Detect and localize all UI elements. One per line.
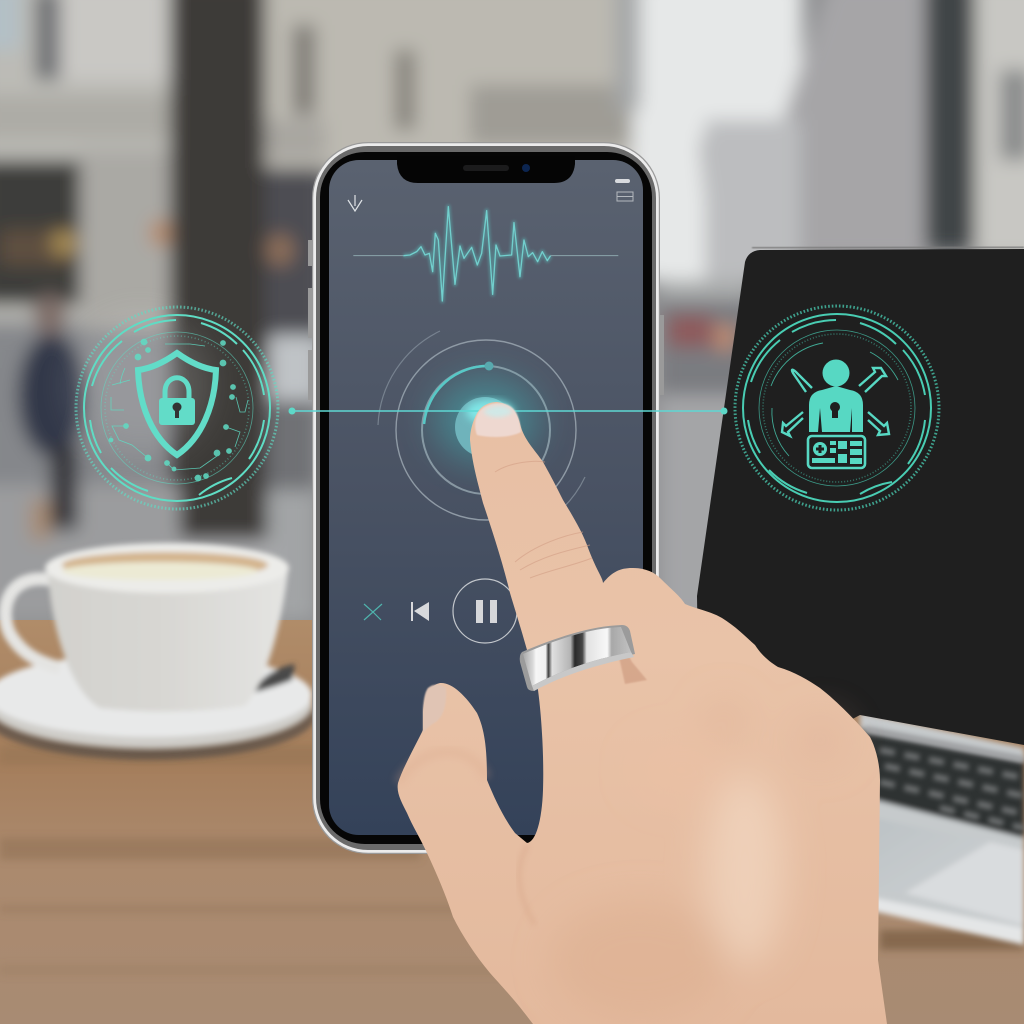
- arrows: [782, 368, 889, 436]
- screen: [329, 160, 643, 835]
- side buttons: [308, 240, 664, 400]
- control panel: [808, 436, 865, 468]
- coffee surface: [62, 552, 268, 578]
- previous icon: [411, 602, 429, 621]
- download icon: [348, 195, 362, 211]
- phone frame: [312, 142, 660, 854]
- keyhole: [830, 402, 840, 418]
- hand with index finger: [398, 402, 887, 1024]
- identity rings: [735, 306, 939, 510]
- coffee cup and saucer: [0, 543, 315, 760]
- laptop screen: [697, 247, 1024, 800]
- spoon: [255, 664, 295, 692]
- cup rim: [45, 543, 289, 593]
- cup body: [48, 570, 288, 712]
- cup handle: [5, 579, 60, 668]
- thumb crease: [519, 845, 535, 925]
- thumbnail: [423, 685, 446, 733]
- shield: [138, 353, 216, 455]
- person icon: [809, 360, 863, 432]
- dial rings: [378, 331, 585, 520]
- shuffle icon: [364, 604, 382, 620]
- ring seam shadow: [612, 625, 647, 684]
- pause button: [453, 579, 517, 643]
- touch glow: [434, 378, 538, 462]
- finger knuckle creases: [495, 461, 592, 578]
- media controls: [364, 579, 517, 643]
- saucer: [0, 653, 315, 760]
- laptop keyboard keys: [880, 750, 1024, 828]
- waveform: [353, 207, 618, 301]
- padlock: [159, 378, 195, 425]
- laptop base and trackpad: [860, 712, 1024, 945]
- laptop hinge strip: [865, 726, 1024, 763]
- circuit traces: [109, 339, 248, 481]
- badge rings: [76, 307, 278, 509]
- status and menu icons: [615, 179, 633, 201]
- connection line: [288, 408, 728, 414]
- blurred street background: [0, 0, 1024, 640]
- phone: [308, 142, 664, 854]
- wooden table: [0, 620, 1024, 1024]
- index fingernail: [475, 403, 521, 437]
- hand silhouette: [398, 402, 887, 1024]
- knuckle and tendon shading: [550, 698, 848, 1020]
- security badge: [70, 307, 278, 509]
- silver smart ring: [520, 625, 635, 691]
- identity badge: [735, 306, 939, 510]
- notch: [397, 156, 575, 183]
- laptop: [697, 247, 1024, 945]
